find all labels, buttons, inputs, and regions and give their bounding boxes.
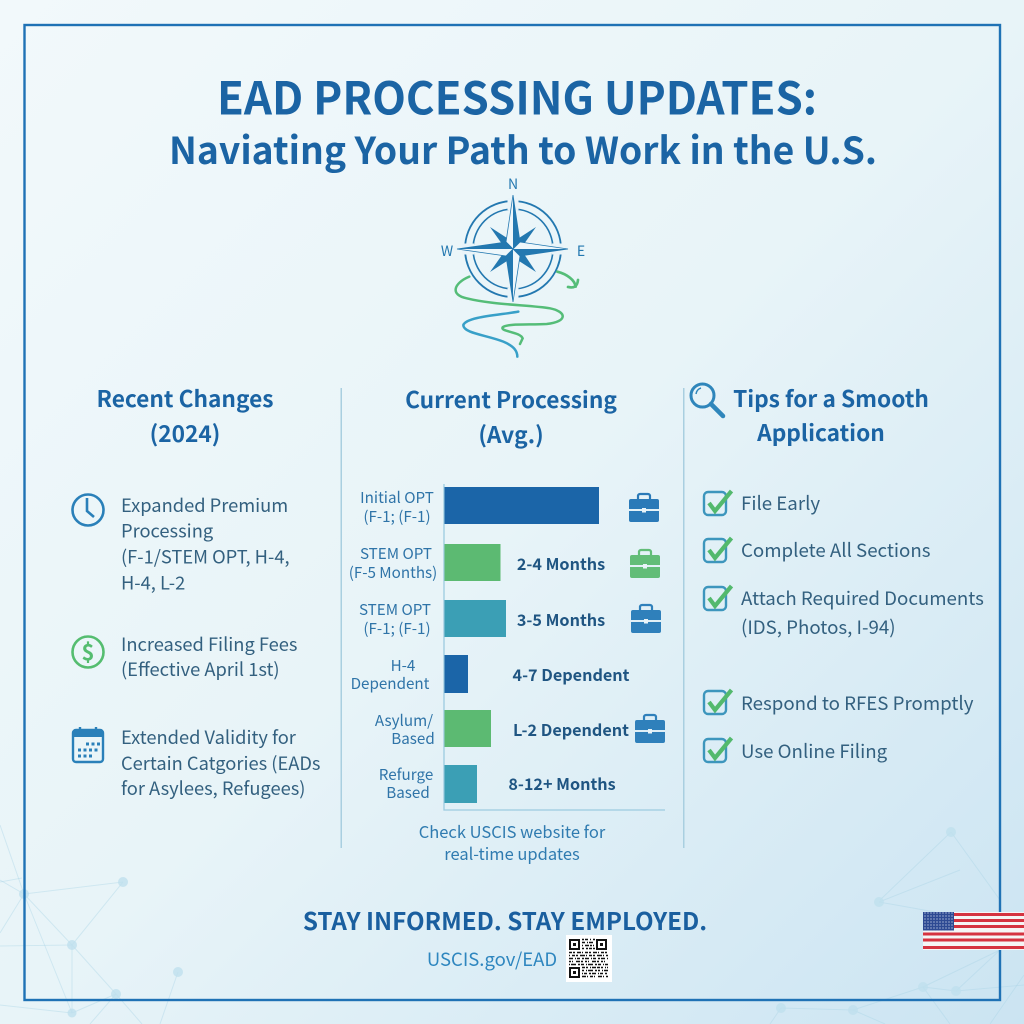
panel: tips xyxy=(691,381,984,764)
decorative network: bottom right xyxy=(770,827,1024,1024)
footer slogan: STAY INFORMED. STAY EMPLOYED. xyxy=(303,902,707,937)
heading: tips xyxy=(733,381,929,448)
icon: dollar: $ xyxy=(82,635,94,667)
row: H-4 dependent xyxy=(351,654,630,694)
row: H-4 dependent: 4-7 Dependent xyxy=(513,662,630,686)
heading: current processing: (Avg.) xyxy=(478,417,544,450)
text: expanded premium processing: Expanded Premium xyxy=(121,492,288,518)
row: H-4 dependent: H-4 xyxy=(391,654,415,676)
tip: respond to RFEs: Respond to RFES Promptly xyxy=(741,689,974,716)
heading: current processing: Current Processing xyxy=(405,382,617,415)
heading: recent changes xyxy=(97,381,273,449)
text: expanded premium processing: Processing xyxy=(121,518,214,544)
column divider right xyxy=(683,388,684,848)
row: STEM OPT 3-5 months: 3-5 Months xyxy=(517,607,605,631)
tip: file early xyxy=(704,489,820,516)
tip: attach required documents xyxy=(704,584,984,640)
row: refugee based: Refurge xyxy=(379,763,433,785)
text: increased filing fees: Increased Filing Fees xyxy=(121,631,298,657)
panel: current processing xyxy=(349,382,665,865)
tip: complete all sections: Complete All Sections xyxy=(741,536,931,563)
heading: tips: Tips for a Smooth xyxy=(733,381,929,414)
row: STEM OPT 2-4 months xyxy=(349,542,660,583)
decorative network: bottom left xyxy=(0,825,183,1024)
text: expanded premium processing: H-4, L-2 xyxy=(121,570,185,596)
text: extended validity: Certain Catgories (EADs xyxy=(121,750,320,776)
bar chart: processing times xyxy=(349,484,665,810)
footer link: USCIS.gov/EAD xyxy=(427,946,557,972)
row: H-4 dependent: Dependent xyxy=(351,672,430,694)
footnote: Check USCIS website for xyxy=(419,819,606,843)
row: initial OPT: (F-1; (F-1) xyxy=(363,505,431,527)
row: refugee based: 8-12+ Months xyxy=(508,771,616,795)
row: initial OPT: Initial OPT xyxy=(360,486,434,508)
icon: compass with winding path: E xyxy=(577,241,585,261)
title: Naviating Your Path to Work in the U.S. xyxy=(169,121,877,175)
row: refugee based: Based xyxy=(386,781,430,803)
text: increased filing fees: (Effective April 1st) xyxy=(121,656,280,682)
tip: attach required documents: Attach Required Documents xyxy=(741,584,984,611)
heading: recent changes: (2024) xyxy=(150,416,220,449)
panel: recent changes xyxy=(72,381,320,801)
icon: clock xyxy=(72,494,104,526)
row: STEM OPT 3-5 months: (F-1; (F-1) xyxy=(363,617,431,639)
row: STEM OPT 2-4 months: (F-5 Months) xyxy=(349,561,437,583)
text: expanded premium processing xyxy=(121,492,290,596)
heading: current processing xyxy=(405,382,617,450)
icon: magnifying glass xyxy=(691,384,723,416)
icon: calendar xyxy=(73,727,103,762)
icon: compass with winding path: W xyxy=(441,241,453,261)
icon: compass with winding path xyxy=(441,174,585,357)
text: increased filing fees xyxy=(121,631,298,682)
title: EAD PROCESSING UPDATES: xyxy=(217,62,817,128)
footnote: real-time updates xyxy=(444,841,580,865)
row: asylum based: L-2 Dependent xyxy=(513,717,629,741)
footnote xyxy=(419,819,606,865)
row: STEM OPT 2-4 months: STEM OPT xyxy=(360,542,432,564)
row: asylum based xyxy=(375,709,665,749)
row: asylum based: Asylum/ xyxy=(375,709,433,731)
heading: tips: Application xyxy=(756,415,885,448)
row: asylum based: Based xyxy=(391,727,435,749)
tip: attach required documents: (IDS, Photos, I-94) xyxy=(741,613,896,640)
icon: dollar xyxy=(72,635,104,668)
row: STEM OPT 3-5 months: STEM OPT xyxy=(359,598,431,620)
tip: use online filing: Use Online Filing xyxy=(741,737,888,764)
tip: file early: File Early xyxy=(741,489,820,516)
icon: compass with winding path: N xyxy=(508,174,518,194)
QR code xyxy=(566,935,612,982)
row: STEM OPT 2-4 months: 2-4 Months xyxy=(517,551,605,575)
heading: recent changes: Recent Changes xyxy=(97,381,273,414)
text: extended validity: for Asylees, Refugees) xyxy=(121,775,305,801)
text: extended validity xyxy=(121,724,320,801)
row: STEM OPT 3-5 months xyxy=(359,598,661,639)
icon: US flag xyxy=(923,912,1024,950)
text: expanded premium processing: (F-1/STEM OPT, H-4, xyxy=(121,544,290,570)
row: initial OPT xyxy=(360,486,659,527)
text: extended validity: Extended Validity for xyxy=(121,724,297,750)
title xyxy=(169,62,877,175)
column divider left xyxy=(340,388,342,848)
row: refugee based xyxy=(379,763,616,803)
